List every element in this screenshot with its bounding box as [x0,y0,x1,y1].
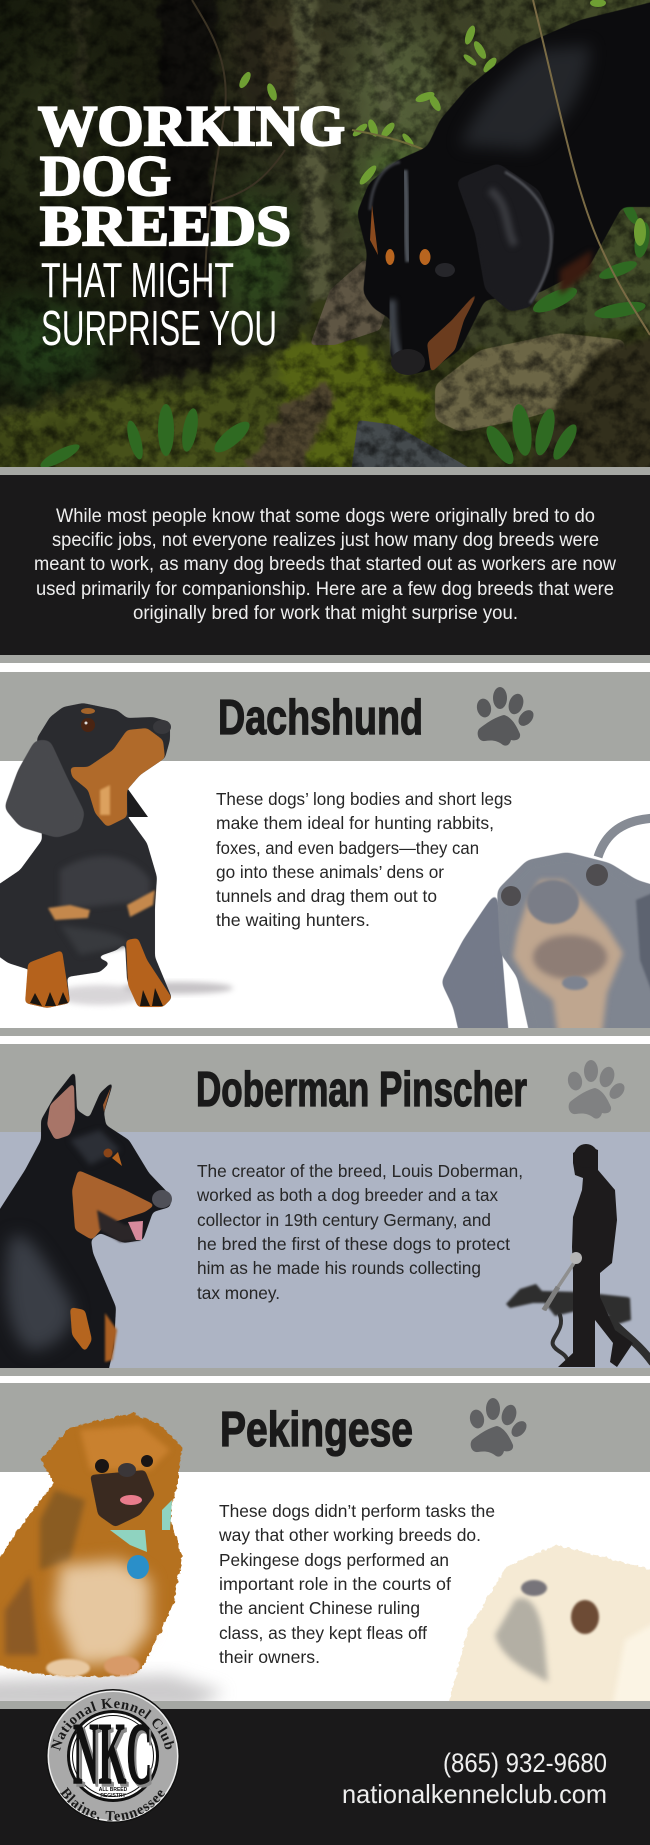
silhouette man [558,1145,633,1367]
head highlights [405,170,408,262]
eye and nose [104,1148,112,1158]
title: BREEDS [40,195,291,258]
dark muzzle [90,1470,155,1527]
pekingese photo [0,1413,182,1677]
body text: he bred the first of these dogs to protect [197,1234,510,1254]
tan bands [48,905,90,920]
footer band [0,1701,650,1845]
body text: tax money. [197,1283,280,1303]
body text: class, as they kept fleas off [219,1623,427,1643]
leaves [38,0,650,472]
intro text: originally bred for work that might surprise you. [133,603,518,624]
heading: Dachshund: Dachshund [218,691,423,745]
body text: go into these animals’ dens or [216,862,444,882]
hero dachshund [357,0,650,375]
title: THAT MIGHT [41,254,234,308]
title [38,95,345,356]
body text: Pekingese dogs performed an [219,1550,449,1570]
mouth and tongue [97,1210,143,1242]
panel: pekingese [0,1383,650,1720]
dog body [357,0,650,375]
faded dachshund [441,818,650,1050]
body text: way that other working breeds do. [218,1525,481,1545]
silhouette dog [553,1315,650,1362]
heading: Pekingese: Pekingese [220,1403,413,1457]
body text: The creator of the breed, Louis Doberman, [197,1161,523,1181]
title: SURPRISE YOU [41,302,277,356]
ear [456,163,555,312]
leash [543,1260,576,1310]
title: WORKING [38,95,345,158]
dog body [0,1070,172,1390]
intro text: specific jobs, not everyone realizes just how many dog breeds were [52,530,599,551]
heading: Doberman Pinscher: Doberman Pinscher [196,1063,527,1117]
bandana [110,1500,172,1552]
mossy ground [0,299,650,467]
ear [4,740,85,838]
tongue [120,1495,142,1505]
divider band [0,1028,650,1036]
paws [46,1659,90,1677]
seal monogram: ALL BREED [99,1787,128,1793]
nose [391,349,425,375]
seal text: National Kennel Club [50,1698,174,1751]
dachshund photo [0,703,172,1008]
chest tan [70,1307,92,1352]
intro text [34,506,616,624]
icon: paw [475,687,536,746]
body text: tunnels and drag them out to [216,886,437,906]
body text: the ancient Chinese ruling [219,1598,420,1618]
body text [196,1161,523,1303]
hero forest background [0,0,650,500]
texture overlay [0,0,650,467]
shadow [123,982,233,994]
faded pekingese [444,1545,650,1720]
shadow [0,1675,225,1710]
stump and rocks [312,260,650,467]
seal text [50,1698,174,1821]
seal monogram [73,1706,154,1806]
tan markings [428,296,475,370]
body text: These dogs didn’t perform tasks the [219,1501,495,1521]
panel: doberman pinscher [0,1044,650,1390]
seal text: Blaine, Tennessee [60,1786,165,1821]
tan cheek [72,1170,155,1240]
tan face [70,728,165,827]
body text: worked as both a dog breeder and a tax [196,1185,498,1205]
logo: NKC seal [46,1689,180,1823]
seal monogram: REGISTRY [100,1793,126,1799]
dog body [0,1413,182,1677]
intro band [0,467,650,663]
body text: the waiting hunters. [216,910,370,930]
hero panel [0,0,650,500]
panel: dachshund [0,672,650,1050]
body text: him as he made his rounds collecting [197,1258,481,1278]
body text: foxes, and even badgers—they can [216,838,479,858]
logo: NKC seal: NKC [73,1706,152,1803]
silhouette: man walking dog [506,1144,650,1367]
divider band [0,1368,650,1376]
legs [25,950,70,1008]
title: DOG [40,145,171,208]
logo: NKC seal: NKC [76,1709,154,1806]
body text: These dogs’ long bodies and short legs [216,789,512,809]
dog body [0,703,172,1008]
body text: make them ideal for hunting rabbits, [216,813,494,833]
body text: their owners. [219,1647,320,1667]
phone: (865) 932-9680 [443,1748,607,1778]
doberman photo [0,1070,172,1390]
website: nationalkennelclub.com [342,1779,607,1809]
eye and nose [81,718,95,732]
icon: paw [566,1060,627,1119]
tag [127,1555,149,1579]
intro text: used primarily for companionship. Here are a few dog breeds that were [36,579,614,600]
body text [218,1501,495,1667]
body text: important role in the courts of [219,1574,451,1594]
body text [216,789,512,930]
intro text: While most people know that some dogs were originally bred to do [56,506,595,527]
twig [533,0,650,335]
body text: collector in 19th century Germany, and [197,1210,491,1230]
intro text: meant to work, as many dog breeds that started out as workers are now [34,554,616,575]
icon: paw [468,1398,529,1457]
